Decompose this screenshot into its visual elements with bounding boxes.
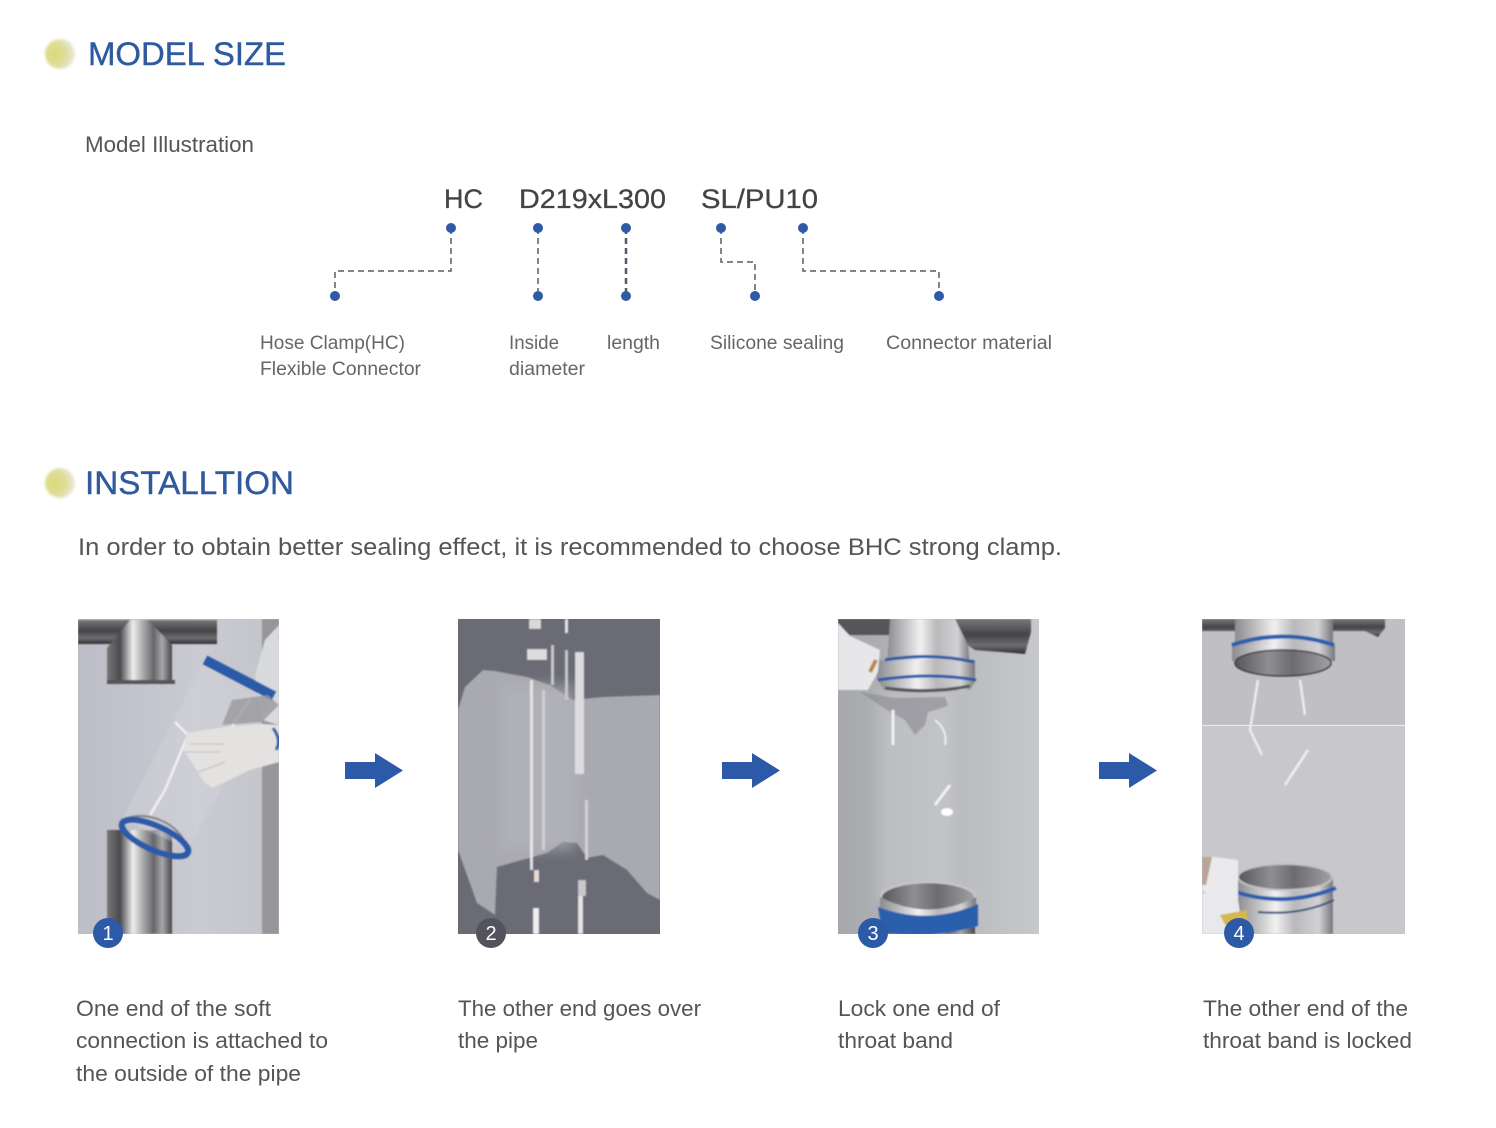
section bullet: model size [45, 39, 75, 69]
dashed connector lines [335, 228, 939, 296]
step 1 badge: 1 [102, 923, 114, 945]
step 4 photo [1202, 619, 1405, 934]
step 2 caption [458, 996, 701, 1053]
arrow 1 [345, 753, 403, 788]
connector labels [260, 333, 1052, 380]
model code text [444, 184, 818, 214]
step 1 caption [76, 996, 328, 1086]
connector labels: Connector material [886, 333, 1052, 354]
model code text: HC [444, 184, 483, 214]
step 2 caption: The other end goes over [458, 996, 701, 1021]
step 4 caption: The other end of the [1203, 996, 1408, 1021]
step 1 caption: One end of the soft [76, 996, 271, 1021]
installation intro text: In order to obtain better sealing effect, it is recommended to choose BHC strong clamp. [78, 534, 1062, 561]
connector labels: Hose Clamp(HC) [260, 333, 405, 354]
connector labels: length [607, 333, 660, 354]
step 4 badge [1224, 918, 1254, 948]
model code diagram [260, 184, 1052, 380]
arrow 3 [1099, 753, 1157, 788]
step 4 caption: throat band is locked [1203, 1028, 1412, 1053]
heading: model size: MODEL SIZE [88, 36, 286, 72]
arrow 2 [722, 753, 780, 788]
step 4 badge: 4 [1233, 923, 1245, 945]
model code text: SL/PU10 [701, 184, 818, 214]
step 2 photo [458, 619, 660, 934]
step 3 photo [838, 619, 1039, 935]
model code text: D219xL300 [519, 184, 666, 214]
step 2 badge: 2 [485, 923, 497, 945]
step 3 badge [858, 918, 888, 948]
section bullet: installation [45, 468, 75, 498]
subheading: model illustration: Model Illustration [85, 132, 254, 157]
heading: installation: INSTALLTION [85, 465, 294, 501]
connector labels: Flexible Connector [260, 359, 422, 380]
step 1 photo [78, 619, 279, 934]
step 1 caption: connection is attached to [76, 1028, 328, 1053]
step 2 caption: the pipe [458, 1028, 538, 1053]
step 1 caption: the outside of the pipe [76, 1061, 301, 1086]
step 2 badge [476, 918, 506, 948]
step 1 badge [93, 918, 123, 948]
step 3 badge: 3 [867, 923, 879, 945]
connector labels: Inside [509, 333, 559, 354]
step 3 caption: Lock one end of [838, 996, 1001, 1021]
connector labels: Silicone sealing [710, 333, 844, 354]
connector dots [330, 223, 944, 301]
step 4 caption [1203, 996, 1412, 1053]
connector labels: diameter [509, 359, 586, 380]
step 3 caption [838, 996, 1001, 1053]
step 3 caption: throat band [838, 1028, 953, 1053]
